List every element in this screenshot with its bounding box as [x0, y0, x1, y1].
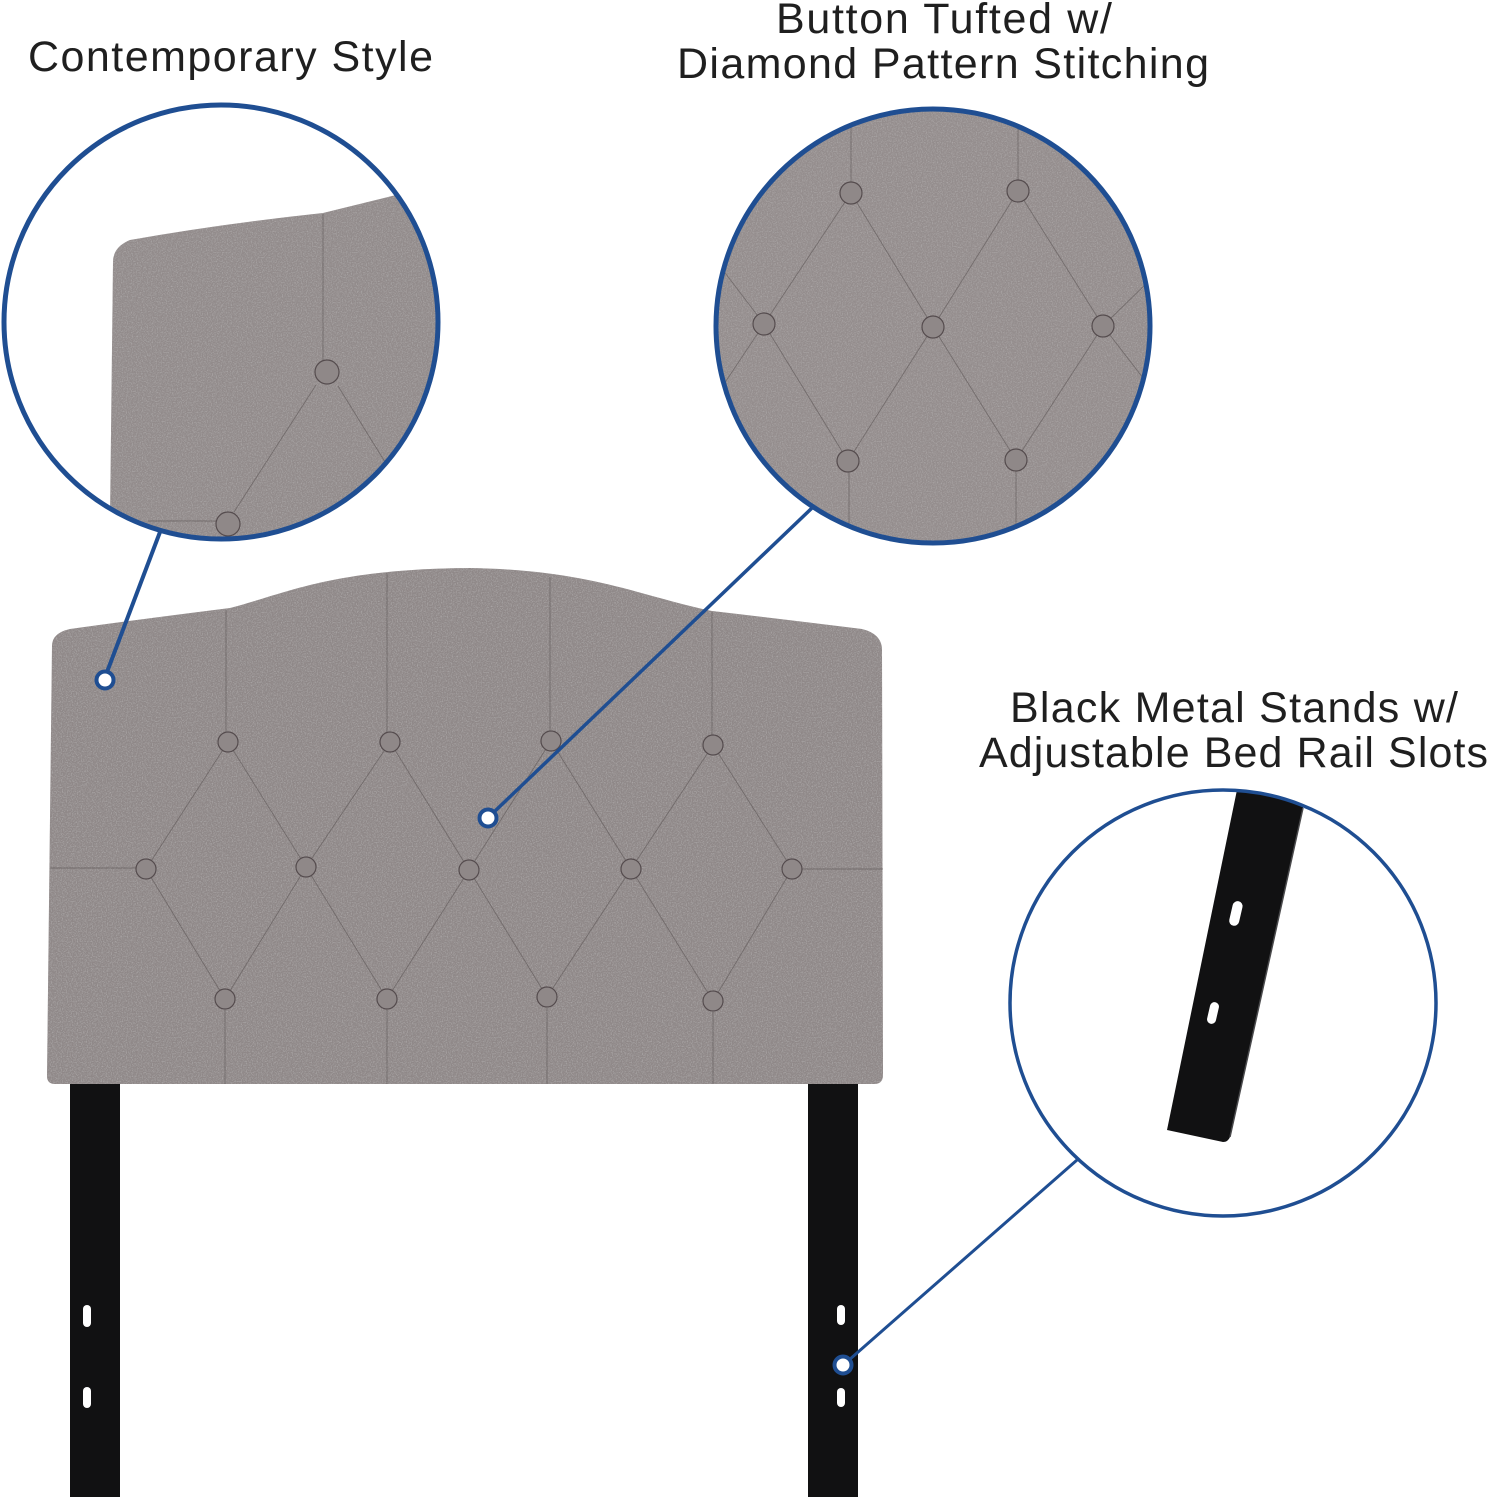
headboard with legs — [47, 568, 883, 1497]
zoom circle: metal stand — [1010, 785, 1436, 1216]
upholstered headboard panel — [47, 568, 883, 1084]
right metal leg — [808, 1084, 858, 1497]
zoom circle: diamond stitching — [700, 105, 1160, 551]
heading: button tufted: Diamond Pattern Stitching — [677, 40, 1209, 88]
leader line to tufting — [480, 508, 812, 826]
heading: black metal stands: Adjustable Bed Rail Slots — [979, 729, 1488, 777]
tufted buttons — [136, 731, 802, 1011]
heading: contemporary style: Contemporary Style — [28, 33, 433, 81]
callout: contemporary style — [4, 33, 445, 688]
leader line to stand — [834, 1160, 1077, 1374]
leader line to headboard corner — [96, 532, 160, 688]
zoom circle: headboard corner — [4, 105, 445, 545]
panel seams — [50, 573, 883, 1084]
heading: black metal stands: Black Metal Stands w/ — [1010, 684, 1458, 732]
left metal leg — [70, 1084, 120, 1497]
callout: black metal stands — [834, 684, 1488, 1374]
diamond stitching — [146, 741, 792, 1001]
callout: button tufted stitching — [480, 0, 1209, 826]
